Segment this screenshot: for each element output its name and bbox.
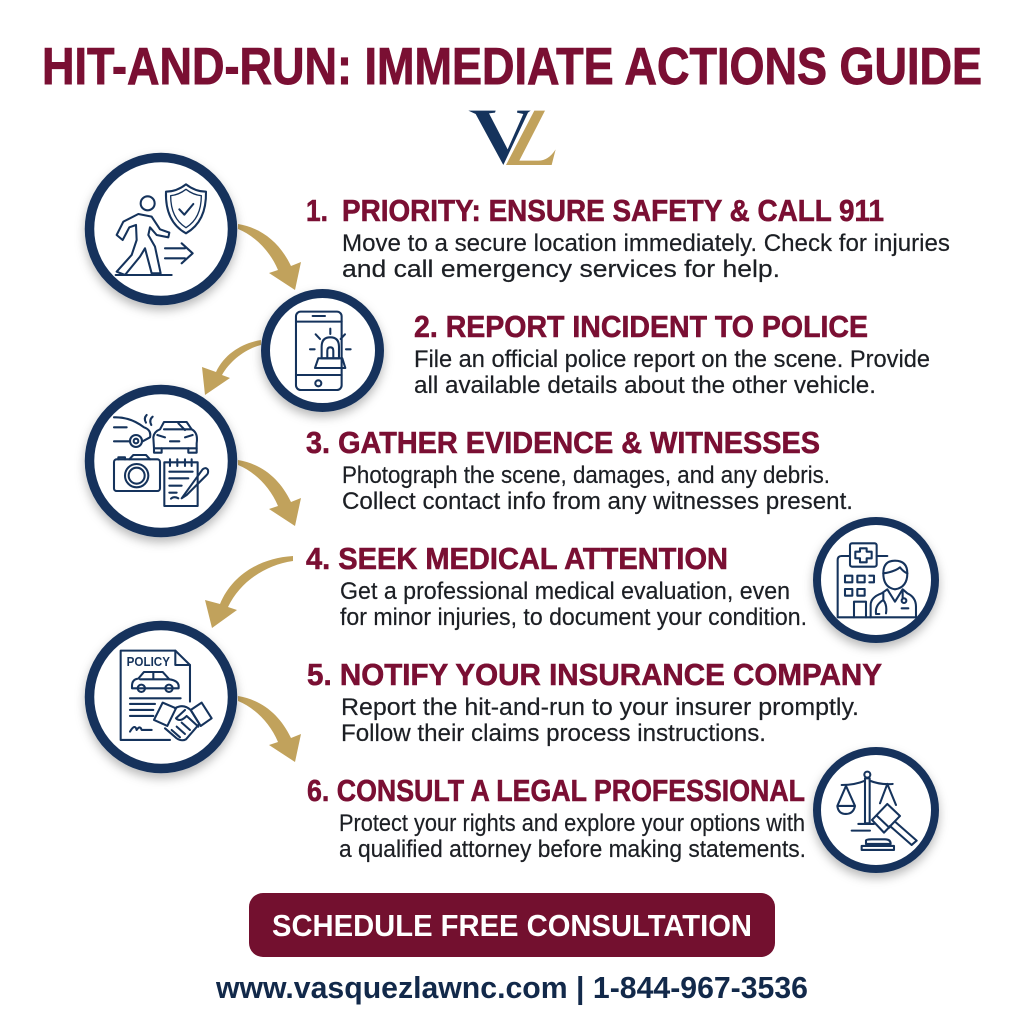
step 4 text: for minor injuries, to document your condition.	[340, 604, 807, 631]
step 6 text: Protect your rights and explore your options with	[339, 810, 805, 837]
step 3 text: Collect contact info from any witnesses present.	[342, 488, 853, 515]
step 3 text	[306, 425, 853, 515]
icon: phone with siren	[266, 294, 380, 408]
step 2 text: File an official police report on the scene. Provide	[414, 346, 930, 373]
icon: crashed cars, camera and notepad	[90, 390, 232, 532]
step 4 text	[306, 541, 807, 631]
call-to-action button: SCHEDULE FREE CONSULTATION	[272, 908, 752, 943]
step 1 text	[306, 193, 950, 283]
icon label: POLICY: POLICY	[127, 655, 170, 669]
contact line: www.vasquezlawnc.com | 1-844-967-3536	[215, 970, 808, 1005]
step 5 text: Follow their claims process instructions.	[341, 720, 766, 747]
step 5 text: Report the hit-and-run to your insurer promptly.	[341, 694, 859, 721]
step 4 text: 4. SEEK MEDICAL ATTENTION	[306, 541, 728, 576]
logo: VL monogram	[468, 111, 556, 165]
step 1 text: and call emergency services for help.	[342, 256, 780, 283]
step 1 text: 1.	[306, 193, 328, 228]
arrow: step 3 to step 4	[238, 460, 301, 526]
arrow: step 4 to step 5	[205, 556, 293, 628]
step 6 text: 6. CONSULT A LEGAL PROFESSIONAL	[307, 773, 805, 808]
step 3 text: 3. GATHER EVIDENCE & WITNESSES	[306, 425, 820, 460]
call-to-action button	[249, 893, 775, 957]
step 2 text: all available details about the other vehicle.	[414, 372, 876, 399]
step 4 text: Get a professional medical evaluation, even	[340, 578, 790, 605]
step 1 text: PRIORITY: ENSURE SAFETY & CALL 911	[342, 193, 884, 228]
icon: policy document and handshake	[90, 626, 232, 768]
step 6 text: a qualified attorney before making statements.	[339, 836, 806, 863]
icon: person walking to safety with shield	[90, 158, 232, 300]
arrow: step 1 to step 2	[238, 224, 301, 290]
step 6 text	[307, 773, 806, 863]
step 1 text: Move to a secure location immediately. Check for injuries	[342, 230, 950, 257]
arrow: step 5 to step 6	[238, 696, 301, 762]
icon: scales of justice and gavel	[817, 751, 935, 869]
arrow: step 2 to step 3	[202, 340, 261, 395]
step 5 text: 5. NOTIFY YOUR INSURANCE COMPANY	[307, 657, 882, 692]
icon: hospital and doctor	[817, 521, 935, 639]
step 5 text	[307, 657, 882, 747]
step 3 text: Photograph the scene, damages, and any debris.	[342, 462, 830, 489]
step 2 text	[414, 309, 930, 399]
step 2 text: 2. REPORT INCIDENT TO POLICE	[414, 309, 868, 344]
